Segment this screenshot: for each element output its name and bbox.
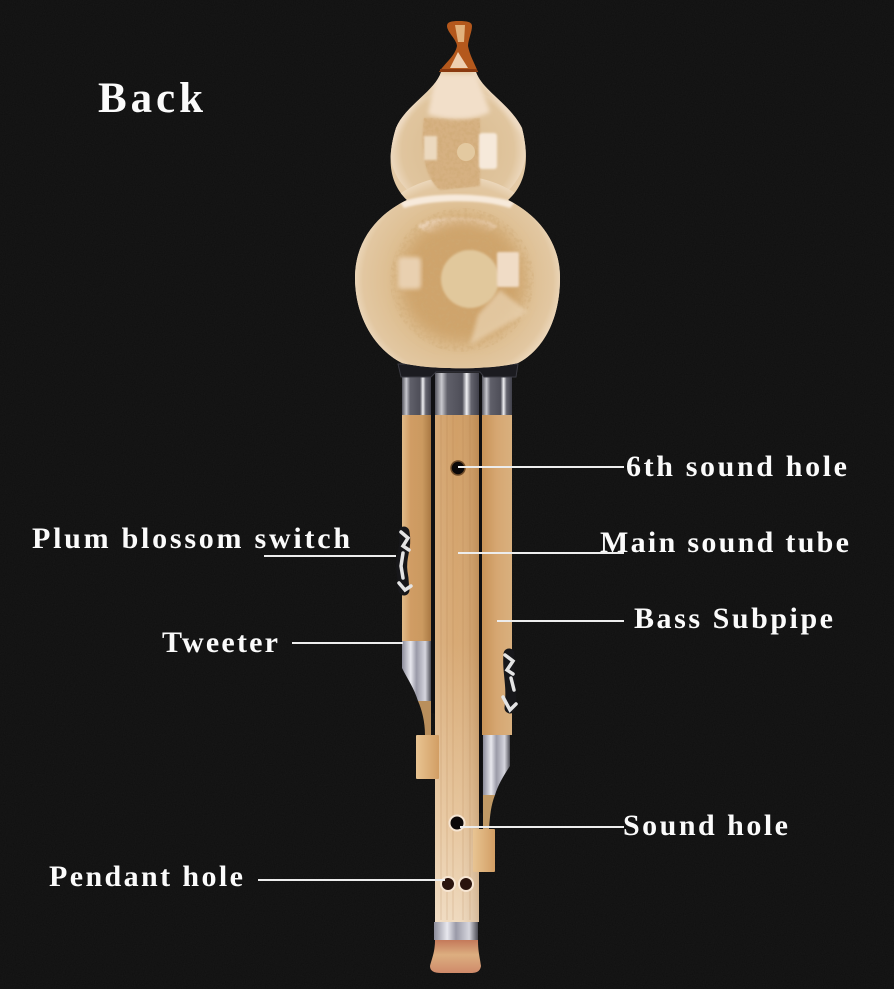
lower bulb centre disc xyxy=(441,250,499,308)
left tweeter tube xyxy=(402,373,435,735)
upper bulb shoulder shine xyxy=(392,72,524,146)
label: 6th sound hole: 6th sound hole xyxy=(626,450,847,483)
upper bulb highlights xyxy=(428,74,490,119)
left reed block xyxy=(416,735,439,779)
lower sound hole xyxy=(450,816,464,830)
metal collar xyxy=(398,364,518,377)
leader line: plum blossom switch xyxy=(264,555,396,557)
label: main sound tube: Main sound tube xyxy=(600,526,849,559)
amber foot cap xyxy=(430,940,481,973)
left plum blossom switch xyxy=(399,532,411,590)
lower bulb upper highlight xyxy=(418,216,497,233)
pendant holes xyxy=(441,877,473,891)
main sound tube xyxy=(430,373,481,973)
upper bulb grain patch xyxy=(423,118,480,190)
label: plum blossom switch: Plum blossom switch xyxy=(32,522,350,555)
label: bass subpipe: Bass Subpipe xyxy=(634,602,833,635)
leader line: pendant hole xyxy=(258,879,445,881)
leader line: tweeter xyxy=(292,642,403,644)
label: sound hole: Sound hole xyxy=(623,809,788,842)
leader line: 6th sound hole xyxy=(458,466,624,468)
right reed block xyxy=(473,829,495,872)
waist shine xyxy=(400,194,515,208)
label: tweeter: Tweeter xyxy=(162,626,278,659)
amber stopper xyxy=(439,21,478,72)
title: Back xyxy=(98,75,203,122)
gourd wind chamber xyxy=(354,70,562,384)
hulusi instrument xyxy=(354,21,562,973)
lower bulb grain ring xyxy=(400,218,524,342)
leader line: main sound tube xyxy=(458,552,624,554)
right plum blossom switch xyxy=(503,654,516,710)
6th sound hole xyxy=(451,461,465,475)
leader line: sound hole xyxy=(460,826,624,828)
leader line: bass subpipe xyxy=(497,620,624,622)
right bass subpipe tube xyxy=(479,373,512,829)
label: pendant hole: Pendant hole xyxy=(49,860,243,893)
